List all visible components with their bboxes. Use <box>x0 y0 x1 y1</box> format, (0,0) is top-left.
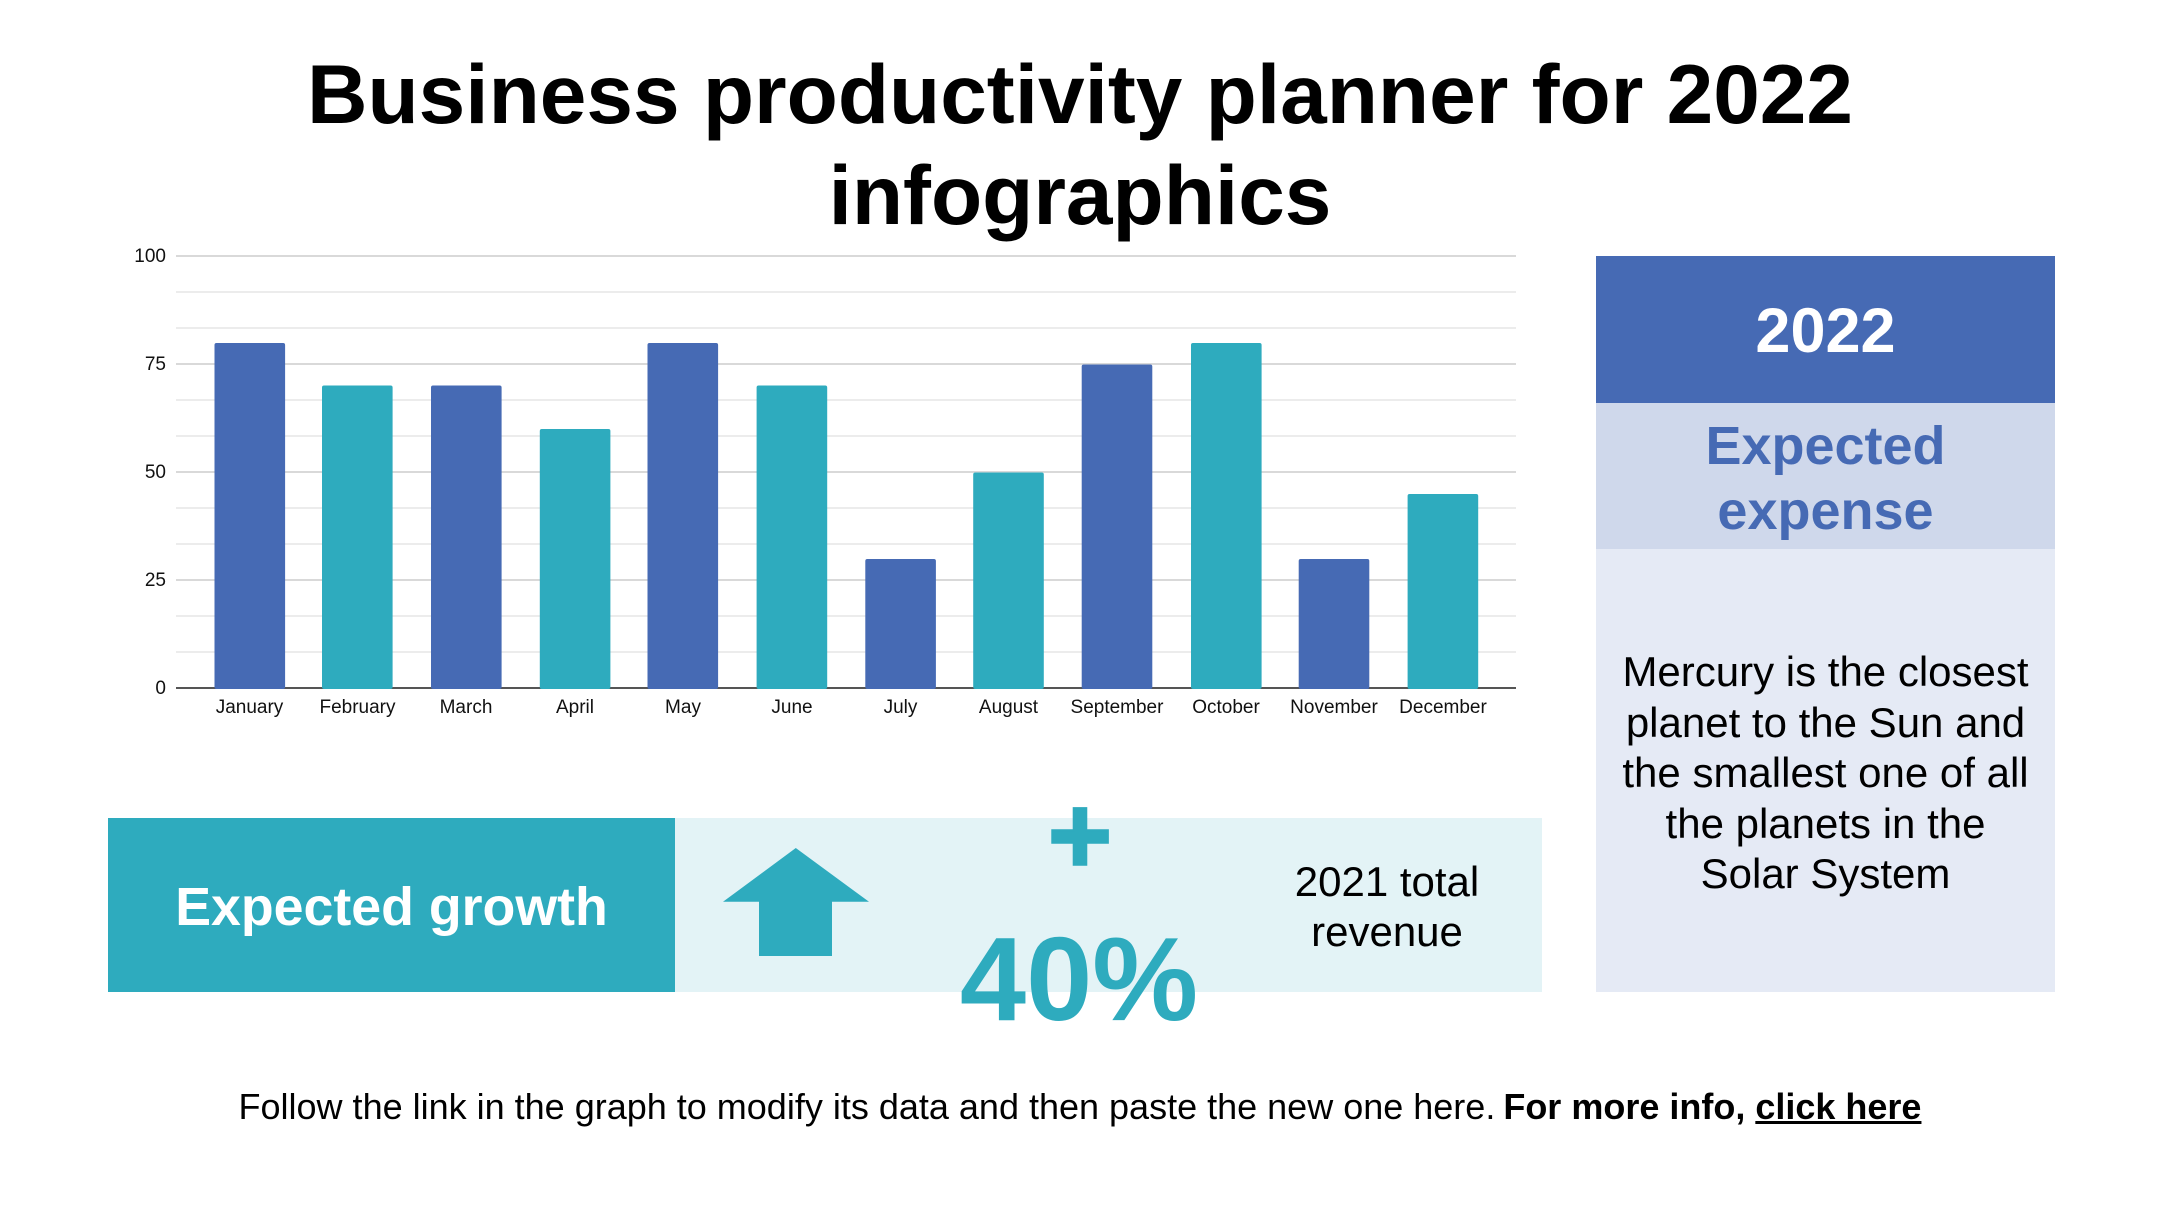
panel: 2022 expected expense <box>1596 256 2055 992</box>
x axis labels: June <box>771 697 813 718</box>
header: 2022 <box>1596 256 2055 403</box>
revenue label: revenue <box>1311 908 1463 955</box>
bar: August 50 <box>973 472 1044 689</box>
subheader: Expected expense <box>1596 403 2055 549</box>
x axis labels: December <box>1399 697 1487 718</box>
title: infographics <box>829 148 1331 242</box>
revenue label: 2021 total <box>1295 858 1479 905</box>
bar: May 80 <box>648 343 718 689</box>
subheader: Expected expense: expense <box>1717 480 1934 540</box>
x axis labels: March <box>440 697 492 718</box>
body text: Mercury description <box>1622 648 2029 897</box>
metric: plus sign: + <box>1048 774 1112 897</box>
x axis labels: February <box>319 697 396 718</box>
y axis labels: 75 <box>145 354 166 375</box>
bar: February 70 <box>322 386 393 689</box>
body text: Mercury description: Solar System <box>1701 850 1950 897</box>
body text: Mercury description: the smallest one of all <box>1622 749 2029 796</box>
body text: Mercury description: the planets in the <box>1666 800 1985 846</box>
y axis labels: 50 <box>145 462 166 483</box>
x axis labels: September <box>1071 697 1164 718</box>
x axis labels: October <box>1192 697 1260 718</box>
bar: September 75 <box>1082 364 1152 689</box>
icon: up arrow <box>723 848 869 956</box>
label: Expected growth <box>108 818 675 992</box>
title: Business productivity planner for 2022 <box>307 47 1853 141</box>
x axis labels: July <box>884 697 918 718</box>
header: 2022: 2022 <box>1755 296 1896 366</box>
title <box>307 47 1853 242</box>
y axis labels: 100 <box>134 246 166 267</box>
body text: Mercury description: planet to the Sun and <box>1626 698 2025 746</box>
x axis labels: November <box>1290 697 1378 718</box>
panel: expected growth <box>108 818 1542 992</box>
bar: November 30 <box>1299 559 1369 689</box>
footer note: Follow the link in the graph to modify its data and then paste the new one here. For more info, click here <box>239 1086 1921 1127</box>
bars <box>214 343 1478 689</box>
subheader: Expected expense: Expected <box>1705 416 1946 476</box>
revenue label <box>1295 858 1479 955</box>
x axis labels <box>216 697 1487 718</box>
y axis labels: 0 <box>155 678 166 699</box>
bar: July 30 <box>865 559 936 689</box>
x axis labels: April <box>556 697 594 718</box>
bar: April 60 <box>540 429 610 689</box>
y axis labels <box>134 246 166 699</box>
x axis labels: January <box>216 697 284 718</box>
bar: October 80 <box>1191 343 1262 689</box>
bar: June 70 <box>757 386 827 689</box>
metric: 40%: 40% <box>960 913 1198 1046</box>
x axis labels: May <box>665 697 701 718</box>
bar: January 80 <box>214 343 285 689</box>
body text: Mercury description: Mercury is the closest <box>1622 648 2029 695</box>
bar: December 45 <box>1408 494 1478 689</box>
bar chart: monthly values <box>134 246 1516 718</box>
bar: March 70 <box>431 386 502 689</box>
y axis labels: 25 <box>145 570 166 591</box>
label: Expected growth: Expected growth <box>175 877 608 937</box>
x axis labels: August <box>979 697 1039 718</box>
